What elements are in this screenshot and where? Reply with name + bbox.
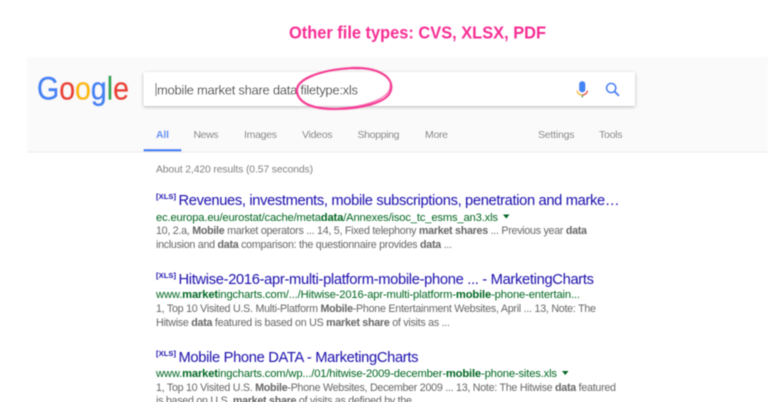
navigation tabs [144,129,622,152]
search result 3: www.marketingcharts.com/wp.../01/hitwise-2009-december-mobile-phone-sites.xls [155,368,557,380]
search result 2: www.marketingcharts.com/.../Hitwise-2016-apr-multi-platform-mobile-phone-entertain... [155,289,580,301]
search result 2: Hitwise-2016-apr-multi-platform-mobile-phone ... - MarketingCharts [178,272,594,288]
icon: search magnifier [607,83,619,96]
search query: mobile market share data filetype:xls [157,82,358,98]
search result 3: 1, Top 10 Visited U.S. Mobile-Phone Websites, December 2009 ... 13, Note: The Hitwise data featured [156,382,616,394]
icon: microphone [577,81,588,98]
search result 1: [XLS] [156,192,176,201]
active tab underline [144,149,182,152]
navigation tabs: Tools [599,129,622,141]
search result 1: ec.europa.eu/eurostat/cache/metadata/Annexes/isoc_tc_esms_an3.xls [156,212,498,224]
search result 3: Mobile Phone DATA - MarketingCharts [178,350,418,366]
navigation tabs: Videos [302,129,332,141]
navigation tabs: News [194,129,218,141]
navigation tabs: All [156,129,169,141]
title: Other file types: CVS, XLSX, PDF [289,22,546,42]
navigation tabs: Images [244,129,277,141]
search result 1: inclusion and data comparison: the questionnaire provides data ... [156,239,452,251]
text cursor [156,83,157,96]
search result 1: 10, 2.a, Mobile market operators ... 14, 5, Fixed telephony market shares ... Previous year data [156,225,588,237]
search result 1 [156,192,620,251]
google logo: Google [37,70,129,106]
search result 3 [155,349,616,402]
search result 1: Revenues, investments, mobile subscriptions, penetration and marke… [178,193,620,209]
search result 2: 1, Top 10 Visited U.S. Multi-Platform Mobile-Phone Entertainment Websites, April ... 13, Note: The [156,303,596,315]
search result 2 [155,271,596,329]
navigation tabs: Settings [538,129,574,141]
search result 3: [XLS] [156,349,176,358]
results count: About 2,420 results (0.57 seconds) [156,164,313,176]
navigation tabs: More [425,129,448,141]
navigation tabs: Shopping [358,129,400,141]
search box [144,72,635,106]
search result 2: [XLS] [156,271,176,280]
highlight circle around filetype [297,68,391,109]
panel: google header band [27,57,768,152]
search result 2: Hitwise data featured is based on US market share of visits as ... [156,317,450,329]
